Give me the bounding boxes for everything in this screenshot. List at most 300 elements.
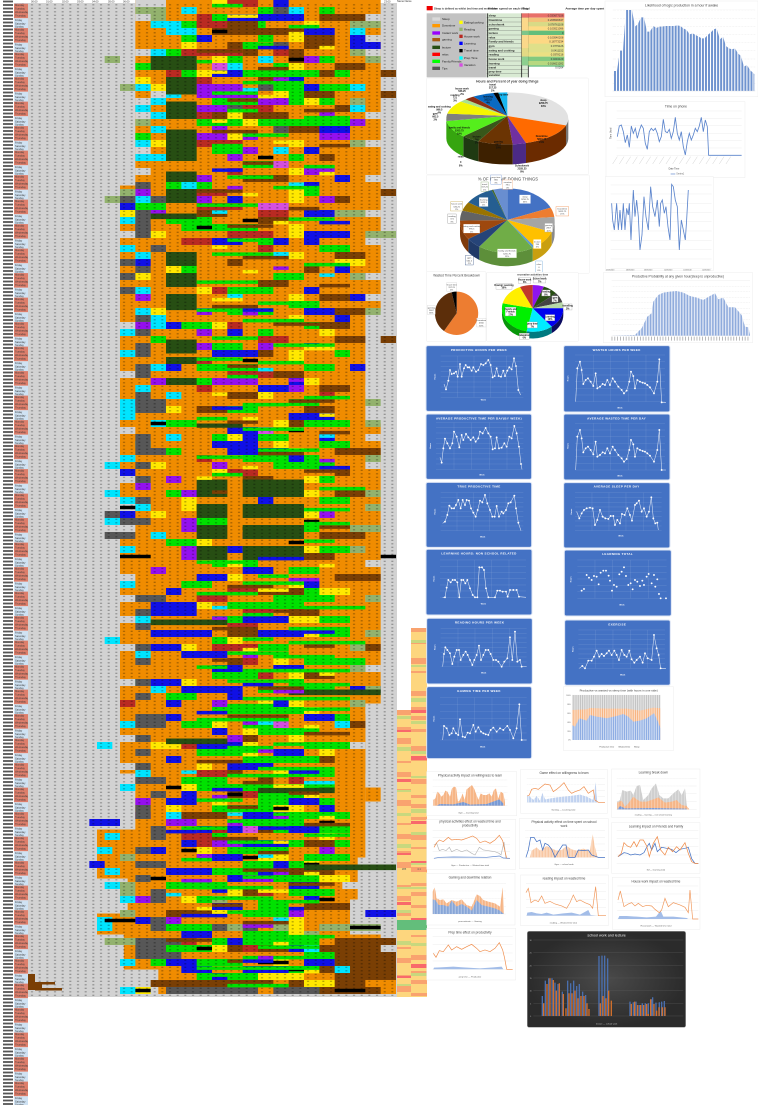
panel: hours pie: 662.5 xyxy=(432,115,439,118)
chart: average wasted time per day: Week xyxy=(617,476,623,478)
chart: average sleep per day: Week xyxy=(618,536,624,538)
panel: hours pie: 3% xyxy=(475,141,479,144)
chart: reading hours per week: READING HOURS PER WEEK xyxy=(455,621,505,625)
panel: percent pie: relax xyxy=(537,263,542,266)
panel: recreative activities pie: 6% xyxy=(523,282,527,284)
panel: hours pie: relax xyxy=(458,155,464,158)
chart: house work impact on wasted time: Housework — Wasted time total xyxy=(641,925,672,928)
totals table: learning xyxy=(489,61,500,65)
chart: exercise: EXERCISE xyxy=(608,622,626,626)
panel: hours pie: 10% xyxy=(496,147,502,150)
panel: recreative activities pie: Reading xyxy=(541,292,551,294)
header times: 09:00 xyxy=(169,0,176,3)
chart: time on phone: Series1 xyxy=(676,173,685,176)
chart: reading impact on wasted time xyxy=(521,875,608,926)
chart: game effect on willingness: Game effect on willingness to learn xyxy=(539,771,589,775)
panel: recreative activities pie: 30% xyxy=(502,288,507,290)
chart: reading hours per week: Week xyxy=(481,672,487,674)
chart: learning break down: Learning break down xyxy=(639,770,668,774)
panel: hours pie: sleep xyxy=(540,99,547,102)
panel: percent pie: vacation xyxy=(504,181,512,184)
panel: percent pie: 9258.75 xyxy=(521,199,530,201)
bottom analysis charts xyxy=(427,769,700,1027)
totals table: 0.208536637 xyxy=(548,18,564,22)
panel: hours pie: 0% xyxy=(459,165,463,168)
header times xyxy=(31,0,391,3)
panel: percent pie: 1% xyxy=(483,189,486,191)
chart: likelihood of logic production: Likelihood of logic production in a hour if awake xyxy=(645,4,718,8)
panel: percent pie: 2807 xyxy=(546,228,552,230)
blue weekly charts xyxy=(426,346,673,759)
chart: physical activity effect on school work xyxy=(519,819,608,869)
totals table: gaming xyxy=(489,27,499,31)
header times: 21:00 xyxy=(353,0,360,3)
panel: recreative activities pie: Downgr Learning xyxy=(494,285,514,287)
totals table: 0.18773234 xyxy=(549,40,564,44)
panel: percent pie: 3% xyxy=(450,221,454,223)
header times: 00:00 xyxy=(31,0,38,3)
panel: percent pie: lecture xyxy=(534,240,541,243)
panel: hours pie: 5205.75 xyxy=(455,130,464,133)
header times: 13:00 xyxy=(230,0,237,3)
heat map columns xyxy=(397,628,427,997)
header times: 01:00 xyxy=(46,0,53,3)
chart: school work and lecture: lecture — school work xyxy=(596,1022,618,1025)
chart: gaming and downtime relation: procrastinate — Gaming xyxy=(458,920,482,923)
panel: percent pie: 0 xyxy=(538,267,540,269)
chart: school work and lecture: 5 xyxy=(530,1003,531,1005)
panel: hours pie: reading xyxy=(451,94,460,97)
panel: percent pie: house work xyxy=(451,203,463,206)
chart: true productive time: Hours xyxy=(433,508,436,515)
chart: productive wasted sleep stacked: Productive vs wasted vs sleep time (with hours in one side) xyxy=(580,689,658,693)
thin rows xyxy=(166,6,365,986)
chart: school work and lecture: 0 xyxy=(530,1016,531,1018)
panel: hours pie: 0 xyxy=(460,161,462,164)
header times: 14:00 xyxy=(246,0,253,3)
panel: hours pie: 1% xyxy=(491,89,495,92)
panel: wasted time pie: 2807 xyxy=(429,310,435,312)
legend: Tips xyxy=(442,66,448,70)
chart: learning total: Hours xyxy=(569,576,572,582)
chart: learning total: Week xyxy=(619,604,625,606)
panel: hours pie: 4% xyxy=(438,112,442,115)
panel: hours pie: 2185.25 xyxy=(517,168,527,171)
totals table: 0.078761108 xyxy=(548,22,564,26)
chart: productive wasted sleep stacked: 80% xyxy=(567,704,571,706)
totals table: 0 xyxy=(562,31,564,35)
panel: wasted time pie: 60% xyxy=(479,325,484,327)
panel: percent pie: learning xyxy=(480,198,488,201)
panel: hours pie: eating and cooking xyxy=(428,106,451,109)
header times: 07:00 xyxy=(138,0,145,3)
chart: physical activities effect on wasted time: productivity xyxy=(462,824,478,828)
weekday column xyxy=(14,3,28,1105)
header times: 11:00 xyxy=(200,0,207,3)
legend: Prep Time xyxy=(464,56,478,60)
totals table: 0.0779126 xyxy=(551,44,564,48)
panel: recreative activities pie: prep time xyxy=(527,323,538,326)
panel: recreative activities pie: recreative activities time xyxy=(517,273,549,277)
panel: hours pie: 33% xyxy=(541,105,547,108)
panel: recreative activities pie: 7% xyxy=(538,281,542,283)
chart: average sleep per day: Hours xyxy=(570,508,573,515)
note at top of sheet: Name Name xyxy=(397,0,412,3)
panel: percent pie: 78.5 xyxy=(506,185,511,187)
chart: school work and lecture xyxy=(527,931,686,1027)
totals table: 0.0378216 xyxy=(551,53,564,57)
chart: learning impact on friends and family: Learning impact on Friends and Family xyxy=(629,824,684,828)
chart: prep time effect on productivity: prep time — Productive xyxy=(459,975,482,978)
heat map columns: 285 xyxy=(402,867,407,871)
totals table: 0.0411152 xyxy=(551,48,564,52)
panel: hours pie: 317.25 xyxy=(489,86,497,89)
panel: hours pie: 3% xyxy=(453,100,458,103)
chart: productive wasted sleep stacked: Productive time xyxy=(599,745,615,748)
panel: percent pie: 536.25 xyxy=(453,206,461,208)
chart: productive wasted sleep stacked: Sleep xyxy=(634,746,640,748)
totals table: schoolwork xyxy=(489,22,505,26)
chart: productive hours per week: PRODUCTIVE HOURS PER WEEK xyxy=(451,348,508,352)
chart: school work and lecture: 10 xyxy=(530,991,532,993)
panel: recreative activities pie xyxy=(487,272,578,342)
panel: percent pie: reading xyxy=(448,215,456,218)
panel: wasted time pie xyxy=(427,272,487,342)
chart: physical activity impact on willingness: Physical activity impact on willingness to learn xyxy=(438,773,502,777)
chart: game effect on willingness: Gaming — Learning total xyxy=(551,809,576,812)
panel: wasted time pie: 317.25 xyxy=(448,287,456,289)
upper right dashboard xyxy=(427,1,758,343)
chart: learning hours non school: Week xyxy=(481,603,487,605)
panel: wasted time pie: Travel time xyxy=(446,283,458,286)
panel: percent pie: 33% xyxy=(523,202,527,204)
legend xyxy=(427,13,487,77)
panel: hours pie: Hours and Percent of year doing things xyxy=(476,79,539,83)
panel: wasted time pie: Wasted Time Percent Breakdown xyxy=(433,274,480,278)
panel: hours pie: family and friends xyxy=(449,127,471,130)
panel: percent pie: 662.5 xyxy=(467,260,473,262)
activity blocks xyxy=(89,0,396,994)
panel: hours pie: learning xyxy=(483,96,493,99)
chart: time on phone xyxy=(606,102,745,178)
top captions xyxy=(427,6,615,10)
totals table: lecture xyxy=(489,31,498,35)
header times: 19:00 xyxy=(322,0,329,3)
chart: physical activities effect on wasted time: Gym — Productive — Wasted time total xyxy=(451,864,490,867)
totals table: 0.100521096 xyxy=(548,27,564,31)
chart: time on phone: Time on phone xyxy=(665,104,687,108)
panel: recreative activities pie: School work xyxy=(533,279,547,281)
chart: physical activities effect on wasted time xyxy=(427,819,516,869)
legend: Vacation xyxy=(464,63,476,67)
panel: percent pie: family and friends xyxy=(499,250,515,253)
top captions: Hidden spend on each thing xyxy=(488,6,528,10)
chart: rating line: 11/09/2018 xyxy=(683,270,692,272)
chart: house work impact on wasted time: House work impact on wasted time xyxy=(631,879,681,883)
chart: productive wasted sleep stacked: 0% xyxy=(568,740,571,742)
panel: percent pie: % OF DE TIME DOING THINGS xyxy=(478,177,538,182)
panel: recreative activities pie: Family and xyxy=(505,309,517,311)
chart: average wasted time per day: AVERAGE WASTED TIME PER DAY xyxy=(587,416,646,420)
header times: 23:00 xyxy=(384,0,391,3)
totals table: travel xyxy=(489,66,496,70)
chart: productive wasted sleep stacked: 40% xyxy=(567,722,571,724)
panel: recreative activities pie: 3% xyxy=(566,308,570,310)
header times: 02:00 xyxy=(62,0,69,3)
panel: recreative activities pie: Learning xyxy=(545,316,555,318)
header times: 10:00 xyxy=(184,0,191,3)
panel: recreative activities pie: gym xyxy=(553,298,557,300)
chart: reading impact on wasted time: reading impact on wasted time xyxy=(543,876,586,880)
chart: gaming time per week: Hours xyxy=(433,715,436,721)
panel: hours pie: 19% xyxy=(457,133,463,136)
panel: hours pie: 2% xyxy=(460,93,465,96)
chart: wasted hours per week xyxy=(564,346,670,412)
chart: gaming time per week xyxy=(427,687,532,759)
header times: 05:00 xyxy=(108,0,115,3)
panel: percent pie: gym xyxy=(467,258,472,260)
panel: recreative activities pie: 8% xyxy=(544,294,549,296)
panel: percent pie: prep time xyxy=(491,176,501,179)
panel: wasted time pie: 4560 xyxy=(479,323,485,325)
panel: percent pie: 4% xyxy=(482,205,485,207)
legend: relax xyxy=(442,52,449,56)
panel: percent pie: 0% xyxy=(506,187,509,189)
chart: school work and lecture: 15 xyxy=(530,978,532,980)
panel: wasted time pie: gaming xyxy=(428,307,436,309)
panel: percent pie xyxy=(427,175,589,273)
header times: 16:00 xyxy=(276,0,283,3)
panel: percent pie: 2% xyxy=(455,209,458,211)
chart: school work and lecture: 25 xyxy=(530,953,532,955)
panel: percent pie: 5205.75 xyxy=(503,253,512,255)
chart: average productive time per day: AVERAGE PRODUCTIVE TIME PER DAY(BY WEEK) xyxy=(436,416,522,420)
panel: hours pie: 1022.5 xyxy=(484,99,492,102)
panel: percent pie: 1022.5 xyxy=(480,202,488,204)
panel: hours pie: 21% xyxy=(539,141,545,144)
chart: learning hours non school: Hours xyxy=(433,575,436,582)
chart: productive probability xyxy=(603,273,753,343)
panel: wasted time pie: Downtime xyxy=(477,319,487,322)
chart: productive wasted sleep stacked xyxy=(564,687,673,751)
panel: recreative activities pie: relaxation xyxy=(519,334,530,337)
panel: percent pie: sleep xyxy=(522,196,528,198)
chart: productive hours per week: Hours xyxy=(433,373,436,380)
chart: learning break down: reading — learning — non school learning xyxy=(635,814,672,817)
legend: Sleep xyxy=(442,17,450,21)
panel: percent pie: 3% xyxy=(494,182,498,184)
header times: 04:00 xyxy=(92,0,99,3)
totals table xyxy=(487,13,564,77)
totals table: 0.0234129 xyxy=(551,57,564,61)
totals table: gym xyxy=(489,44,495,48)
chart: gaming time per week: Week xyxy=(480,746,486,748)
legend: Travel time xyxy=(464,49,479,53)
header times: 22:00 xyxy=(368,0,375,3)
chart: average productive time per day xyxy=(426,414,532,479)
totals table: vacation xyxy=(489,73,500,77)
cell text texture xyxy=(28,3,397,997)
legend: Eating/cooking xyxy=(464,21,484,25)
panel: hours pie: Downtime xyxy=(536,135,548,138)
header times: 20:00 xyxy=(338,0,345,3)
panel: hours pie: 9258.75 xyxy=(539,102,548,105)
chart: productive wasted sleep stacked: 100% xyxy=(566,695,571,697)
chart: productive wasted sleep stacked: 60% xyxy=(567,713,571,715)
panel: hours pie: 2807 xyxy=(496,144,502,147)
panel: percent pie: 3% xyxy=(536,247,539,249)
chart: physical activity effect on school work: Physical activity effect on time spent on school xyxy=(531,820,597,824)
panel: recreative activities pie: travelling xyxy=(562,305,573,308)
chart: learning total xyxy=(564,550,671,616)
chart: rating line: 09/09/2018 xyxy=(644,270,652,272)
chart: reading hours per week xyxy=(427,618,532,684)
chart: school work and lecture: school work and lecture xyxy=(587,934,626,938)
header times: 12:00 xyxy=(215,0,222,3)
chart: average productive time per day: Week xyxy=(479,474,485,476)
chart: rating line: 08/09/2018 xyxy=(626,270,634,272)
chart: physical activity impact on willingness: Gym — learning total xyxy=(458,811,479,814)
chart: prep time effect on productivity: Prep time effect on productivity xyxy=(448,930,492,934)
chart: rating line: 07/09/2018 xyxy=(606,270,614,272)
panel: recreative activities pie: 17% xyxy=(508,314,514,316)
totals table: 0.0264 xyxy=(555,66,564,70)
chart: prep time effect on productivity xyxy=(427,928,516,980)
chart: rating line: 12/09/2018 xyxy=(702,270,710,272)
panel: recreative activities pie: House work xyxy=(518,279,532,281)
chart: rating line: 10/09/2018 xyxy=(664,270,672,272)
chart: gaming time per week: GAMING TIME PER WEEK xyxy=(457,689,501,693)
header times: 17:00 xyxy=(292,0,299,3)
header times: 03:00 xyxy=(77,0,84,3)
totals table: 0.333677156 xyxy=(548,14,564,18)
panel: hours pie: 721 xyxy=(453,97,458,100)
chart: learning total: LEARNING TOTAL xyxy=(602,552,633,556)
time table grid xyxy=(28,0,397,997)
chart: house work impact on wasted time xyxy=(612,877,700,929)
chart: physical activity impact on willingness xyxy=(427,772,517,816)
chart: productive probability: Productive Probability at any given hour(sleep is unproductive) xyxy=(632,274,724,278)
panel: hours pie: prep time xyxy=(497,93,509,96)
panel: recreative activities pie: 7% xyxy=(531,326,535,328)
top captions: Sleep is defined as whilst bed time and woke time xyxy=(434,6,497,10)
chart: reading impact on wasted time: reading — Wasted time total xyxy=(550,921,577,924)
legend: Downtime xyxy=(442,24,456,28)
chart: physical activities effect on wasted time: physical activities effect on wasted time and xyxy=(439,820,501,824)
legend: Family/Friends xyxy=(442,59,462,63)
totals table: 0.100540208 xyxy=(548,35,564,39)
panel: hours pie: gym xyxy=(433,113,439,116)
chart: game effect on willingness xyxy=(521,769,607,813)
legend: gaming xyxy=(442,38,452,42)
chart: exercise xyxy=(565,620,670,685)
panel: percent pie: 721 xyxy=(450,219,455,221)
panel: hours pie: 4% xyxy=(486,102,491,105)
panel: percent pie: travel xyxy=(482,183,488,186)
totals table: prep time xyxy=(489,69,502,73)
chart: wasted hours per week: Week xyxy=(617,408,623,410)
chart: average wasted time per day xyxy=(564,414,670,480)
panel: percent pie: Downtime xyxy=(558,207,568,210)
panel: wasted time pie: 4% xyxy=(450,290,453,292)
panel: recreative activities pie: Friends xyxy=(506,312,516,314)
header times: 06:00 xyxy=(123,0,130,3)
panel: percent pie: 866 xyxy=(494,180,499,182)
chart: learning break down xyxy=(612,769,700,817)
panel: hours pie: house work xyxy=(455,87,470,90)
chart: average sleep per day: AVERAGE SLEEP PER DAY xyxy=(594,485,640,489)
chart: true productive time: TRUE PRODUCTIVE TIME xyxy=(457,484,501,488)
chart: productive wasted sleep stacked: 20% xyxy=(567,731,571,733)
chart: rating line xyxy=(605,177,713,272)
panel: percent pie: gaming xyxy=(545,225,553,227)
totals table: sleep xyxy=(489,14,496,18)
chart: wasted hours per week: WASTED HOURS PER WEEK xyxy=(593,348,641,352)
panel: wasted time pie: 36% xyxy=(429,313,434,315)
panel: percent pie: 4% xyxy=(470,231,473,233)
totals table: eating and cooking xyxy=(489,48,515,52)
panel: hours pie xyxy=(427,78,588,175)
legend: lecture xyxy=(442,45,451,49)
chart: average wasted time per day: Hours xyxy=(567,442,570,449)
panel: recreative activities pie: 10% xyxy=(548,319,553,321)
chart: average productive time per day: Hours xyxy=(429,442,432,449)
chart: school work and lecture: 20 xyxy=(530,965,532,967)
chart: true productive time: Week xyxy=(480,536,486,538)
panel: percent pie: eating and cooking xyxy=(463,225,482,228)
panel: hours pie: lecture xyxy=(473,135,481,138)
totals table: house work xyxy=(489,57,505,61)
panel: recreative activities pie: 7% xyxy=(553,300,558,302)
chart: learning impact on friends and family: f&f — learning total xyxy=(647,869,666,872)
chart: school work and lecture: 30 xyxy=(530,940,532,942)
totals table: reading xyxy=(489,53,499,57)
chart: time on phone: Time Used xyxy=(610,127,612,139)
panel: percent pie: 19% xyxy=(505,256,509,258)
panel: hours pie: 2% xyxy=(434,118,438,121)
panel: hours pie: travel xyxy=(489,84,496,87)
panel: hours pie: 996.5 xyxy=(436,109,443,112)
totals table: Family and friends xyxy=(489,40,514,44)
chart: productive wasted sleep stacked: Wasted time xyxy=(618,745,631,748)
chart: physical activity effect on school work: Gym — school work xyxy=(554,863,575,866)
chart: gaming and downtime relation: Gaming and downtime relation xyxy=(449,875,492,879)
chart: average sleep per day xyxy=(564,483,670,548)
chart: time on phone: Date Time xyxy=(669,167,680,170)
chart: wasted hours per week: Hours xyxy=(567,375,570,381)
legend: Learning xyxy=(464,41,476,45)
chart: gaming and downtime relation xyxy=(427,873,515,925)
panel: percent pie: 10% xyxy=(546,230,551,232)
legend: House work xyxy=(464,34,480,38)
panel: hours pie: Schoolwork xyxy=(515,165,530,168)
top captions: Total xyxy=(523,6,530,10)
panel: hours pie: 760 xyxy=(475,138,479,141)
header times: 08:00 xyxy=(154,0,161,3)
panel: hours pie: 5819.75 xyxy=(537,138,547,141)
top captions: Average time per day spent in each xyxy=(565,6,615,10)
panel: percent pie: 760 xyxy=(536,244,540,246)
legend: Reading xyxy=(464,27,475,31)
panel: hours pie: 536.25 xyxy=(458,90,466,93)
panel: recreative activities pie: 0% xyxy=(523,338,527,340)
panel: percent pie: 21% xyxy=(560,214,565,216)
chart: productive hours per week xyxy=(426,346,532,411)
chart: physical activity effect on school work: work xyxy=(561,824,568,828)
panel: percent pie: 2% xyxy=(468,263,471,265)
chart: exercise: Hours xyxy=(571,646,574,652)
heat map columns: 4.1 xyxy=(417,867,421,871)
